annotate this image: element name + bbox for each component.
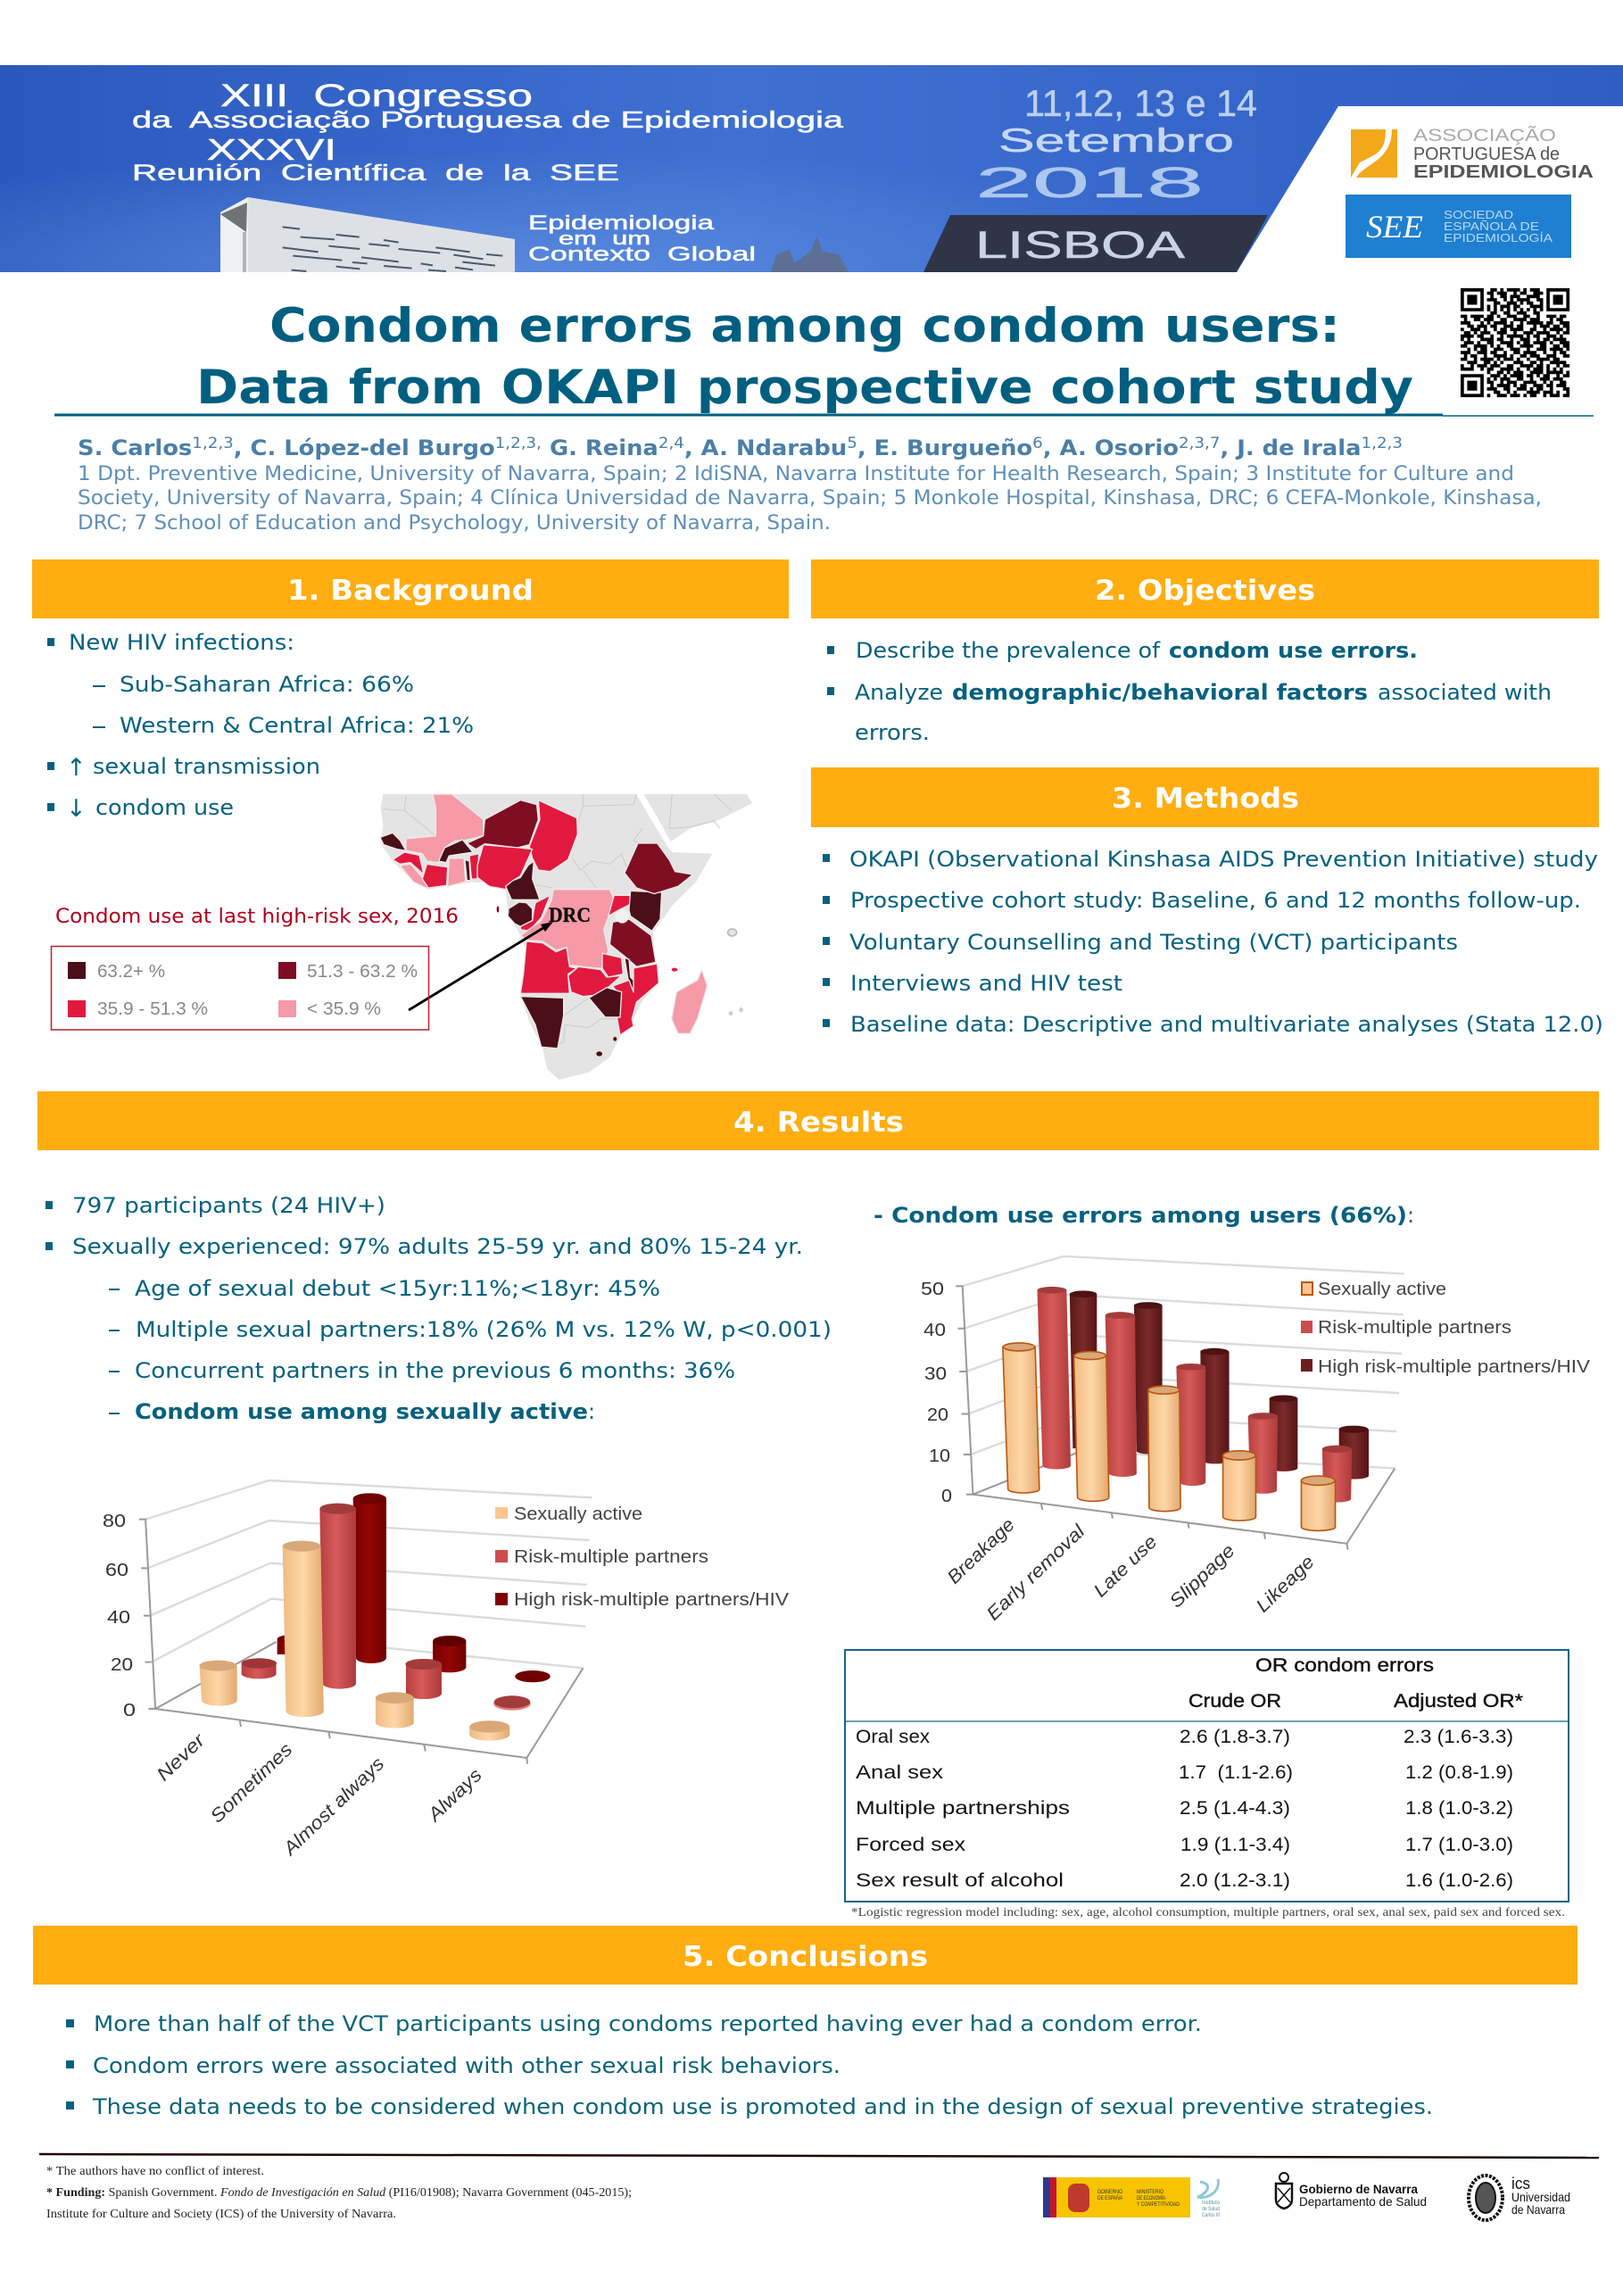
chart legend [495,1504,790,1610]
banner: dates: 11,12, 13 e 14 [1024,82,1257,124]
table row: anal sex: 1.7 (1.1-2.6) [1179,1762,1293,1783]
heading: 2. Objectives [811,559,1599,618]
heading: 4. Results: 4. Results [733,1107,904,1139]
map legend [52,946,428,1030]
table row: forced sex: 1.9 (1.1-3.4) [1180,1835,1290,1855]
table row: forced sex: Forced sex [856,1835,966,1855]
background bullet list: Western & Central Africa: 21% [120,713,474,738]
results bullet list: 797 participants (24 HIV+) [72,1193,385,1218]
affiliations [78,462,1542,535]
header banner [0,65,1623,272]
map legend: 51.3 - 63.2 % [307,962,418,982]
authors: 2,3,7 [1179,435,1221,452]
authors: , A. Ndarabu [684,435,847,460]
table row: forced sex [856,1835,1513,1855]
panel: methods [811,767,1603,1037]
chart axis labels: Never [153,1729,210,1786]
logo: Instituto de Salud Carlos III: Instituto [1202,2201,1221,2206]
background bullet list: ↓ [66,795,87,823]
table row: sex result of alcohol: 1.6 (1.0-2.6) [1405,1870,1513,1891]
logo: Gobierno de Navarra: Departamento de Salud [1299,2194,1427,2209]
subheading: condom use errors: : [1407,1203,1414,1228]
results bullet list: Multiple sexual partners:18% (26% M vs. 12% W, p<0.001) [136,1317,832,1342]
methods bullet list: Interviews and HIV test [850,971,1122,996]
banner: Lisboa box [923,215,1268,272]
title: Condom errors among condom users: [269,299,1340,353]
heading: 3. Methods [811,767,1599,827]
map caption: Condom use at last high-risk sex, 2016 [55,906,459,928]
chart legend: Sexually active [1318,1280,1446,1299]
footer notes: Institute for Culture and Society (ICS) of the University of Navarra. [46,2208,396,2221]
conclusions bullet list: Condom errors were associated with other sexual risk behaviors. [93,2053,840,2078]
affiliations: Society, University of Navarra, Spain; 4 Clínica Universidad de Navarra, Spain; 5 Monkole Hospital, Kinshasa, DRC; 6 CEFA-Monkole, Kinshasa, [78,486,1542,510]
chart legend [1301,1280,1591,1377]
chart axis labels: 20 [111,1655,133,1675]
logo: Associação Portuguesa de Epidemiologia: EPIDEMIOLOGIA [1413,162,1594,182]
authors: 1,2,3 [1362,435,1403,452]
chart axis labels: 20 [927,1405,948,1425]
logo: Instituto de Salud Carlos III: Carlos III [1202,2213,1220,2218]
results bullet list [46,1193,832,1424]
authors: , J. de Irala [1221,435,1362,460]
results bullet list: Sexually experienced: 97% adults 25-59 yr. and 80% 15-24 yr. [72,1234,803,1259]
panel: objectives [811,559,1599,745]
conclusions bullet list: These data needs to be considered when condom use is promoted and in the design of sexual preventive strategies. [92,2094,1433,2119]
banner: congress name: Reunión Científica de la SEE [132,161,619,186]
logo: ICS Universidad de Navarra: Universidad [1511,2190,1570,2204]
table row: sex result of alcohol: 2.0 (1.2-3.1) [1180,1870,1290,1891]
chart legend: High risk-multiple partners/HIV [1318,1357,1591,1377]
logo: Spanish government: GOBIERNO [1097,2190,1122,2195]
table row: anal sex: 1.2 (0.8-1.9) [1405,1762,1513,1783]
chart: condom use errors among users [921,1256,1591,1625]
logo: Spanish government: DE ESPAÑA [1097,2195,1122,2201]
panel: conclusions [33,1926,1577,2119]
results bullet list: Concurrent partners in the previous 6 months: 36% [135,1358,735,1383]
authors: 1,2,3, [495,435,542,452]
banner: logo panel [1237,106,1623,272]
table row: oral sex: 2.6 (1.8-3.7) [1180,1727,1290,1747]
results bullet list: Age of sexual debut <15yr:11%;<18yr: 45% [135,1276,660,1301]
authors: 1,2,3 [192,435,234,452]
chart legend: Risk-multiple partners [514,1547,708,1567]
arrow: legend to DRC [409,922,553,1010]
panel: results [37,1091,1599,1919]
chart axis labels: Early removal [982,1521,1089,1625]
chart axis labels: Almost always [278,1753,389,1861]
table footnote: *Logistic regression model including: sex, age, alcohol consumption, multiple partners, oral sex, anal sex, paid sex and forced sex. [851,1906,1565,1919]
icon: QR code [1461,288,1569,397]
table row: oral sex [856,1727,1513,1747]
logo: Gobierno de Navarra: Gobierno de Navarra [1299,2182,1418,2196]
table header [1188,1655,1523,1712]
heading: 5. Conclusions: 5. Conclusions [683,1941,928,1973]
table header: OR condom errors [1255,1655,1434,1676]
conclusions bullet list: More than half of the VCT participants using condoms reported having ever had a condom error. [94,2011,1202,2036]
table row: anal sex: Anal sex [856,1762,944,1783]
chart axis labels: 40 [107,1608,130,1628]
banner: congress name [132,79,844,186]
heading: 5. Conclusions [33,1926,1577,1985]
results bullet list: : [588,1399,595,1424]
chart axis labels: 30 [924,1364,947,1384]
background bullet list: condom use [95,795,234,820]
banner: theme: em um [559,229,650,249]
chart axis labels: Breakage [943,1514,1019,1588]
logo: Spanish government: MINISTERIO [1137,2190,1163,2195]
banner: building illustration [220,197,849,272]
table row: oral sex: Oral sex [856,1727,931,1747]
banner: congress name: XIII Congresso [220,79,533,113]
chart legend: High risk-multiple partners/HIV [514,1590,790,1610]
chart axis labels: 0 [941,1487,952,1506]
chart axis labels: 80 [103,1512,126,1531]
table: OR condom errors [845,1650,1569,1902]
map: condom use in Africa [380,794,752,1080]
footer notes: * The authors have no conflict of interest. [46,2165,264,2178]
authors: 5 [847,435,857,452]
heading: 1. Background: 1. Background [287,575,534,607]
banner: congress name: XXXVI [207,133,336,166]
footer notes [46,2165,632,2221]
title [196,299,1413,415]
logo: Instituto de Salud Carlos III [1197,2179,1221,2218]
background bullet list [47,630,474,823]
logo: Sociedad Española de Epidemiología [1346,195,1571,258]
panel: background [32,559,789,1080]
table row: sex result of alcohol: Sex result of alcohol [856,1870,1064,1891]
background bullet list: Sub-Saharan Africa: 66% [120,672,414,697]
table row: forced sex: 1.7 (1.0-3.0) [1405,1835,1513,1855]
heading: 4. Results [37,1091,1599,1150]
logo: Spanish government: Y COMPETITIVIDAD [1137,2202,1180,2208]
table row: multiple partnerships: Multiple partnerships [856,1798,1070,1819]
heading: 3. Methods: 3. Methods [1112,783,1299,815]
authors: G. Reina [542,435,658,460]
subheading: condom use errors: - Condom use errors among users (66%) [874,1203,1407,1228]
banner: Lisboa box: LISBOA [975,224,1185,267]
chart axis labels: Sometimes [206,1739,297,1828]
authors: 6 [1032,435,1043,452]
logo: Sociedad Española de Epidemiología: SEE [1366,209,1423,245]
map legend: 35.9 - 51.3 % [97,999,208,1019]
chart axis labels: Slippage [1165,1540,1239,1612]
objective 1: condom use errors. [1169,638,1418,663]
chart axis labels: Late use [1089,1531,1161,1602]
logo: ICS Universidad de Navarra [1469,2175,1570,2220]
heading: 1. Background [32,559,789,618]
chart legend: Risk-multiple partners [1318,1318,1511,1338]
logo: Sociedad Española de Epidemiología: SOCIEDAD [1444,208,1513,221]
chart axis labels: 50 [921,1280,944,1299]
authors: 2,4 [658,435,684,452]
table header: Adjusted OR* [1394,1691,1523,1712]
logo: Sociedad Española de Epidemiología: EPIDEMIOLOGÍA [1444,231,1553,245]
authors: , E. Burgueño [857,435,1032,460]
map legend: 63.2+ % [97,962,165,982]
table row: multiple partnerships [856,1798,1513,1819]
authors: S. Carlos [78,435,184,460]
chart: condom use among sexually active [103,1480,790,1861]
chart axis labels: 0 [123,1701,136,1720]
banner: theme [528,211,756,265]
methods bullet list [823,847,1603,1037]
banner: congress name: da Associação Portuguesa de Epidemiologia [132,106,844,133]
table row: multiple partnerships: 2.5 (1.4-4.3) [1180,1798,1290,1819]
map legend: < 35.9 % [307,999,381,1019]
logo: Instituto de Salud Carlos III: de Salud [1202,2207,1220,2212]
objective 2: associated with [1378,680,1552,705]
title: Data from OKAPI prospective cohort study [196,361,1413,415]
objective 1: Describe the prevalence of [856,638,1161,663]
objective 2: Analyze [855,680,943,705]
logo: Spanish government [1043,2177,1190,2217]
logo: ICS Universidad de Navarra: ics [1511,2175,1530,2192]
banner: dates [975,82,1257,207]
logo: Associação Portuguesa de Epidemiologia: PORTUGUESA de [1413,145,1560,164]
objective 2: errors. [855,720,930,745]
results bullet list: Condom use among sexually active [135,1399,588,1424]
logo: ICS Universidad de Navarra: de Navarra [1511,2202,1565,2217]
banner: theme: Epidemiologia [528,211,715,234]
background bullet list: ↑ [66,754,87,782]
logo: Gobierno de Navarra [1276,2173,1427,2209]
table row: sex result of alcohol [856,1870,1513,1891]
objective 2 [827,680,1552,745]
chart axis labels: 60 [105,1561,128,1580]
heading: 2. Objectives: 2. Objectives [1095,575,1315,607]
objective 1 [827,638,1418,663]
table header: Crude OR [1188,1691,1281,1712]
methods bullet list: Baseline data: Descriptive and multivariate analyses (Stata 12.0) [850,1012,1603,1037]
authors: , A. Osorio [1043,435,1179,460]
chart axis labels: 40 [923,1321,946,1340]
table row: anal sex [856,1762,1513,1783]
banner: theme: Contexto Global [528,243,756,265]
methods bullet list: Prospective cohort study: Baseline, 6 and 12 months follow-up. [850,888,1581,913]
methods bullet list: Voluntary Counselling and Testing (VCT) participants [849,930,1458,955]
banner: dates: 2018 [975,160,1204,207]
affiliations: DRC; 7 School of Education and Psychology, University of Navarra, Spain. [78,511,831,535]
banner: dates: Setembro [998,122,1234,159]
table row: oral sex: 2.3 (1.6-3.3) [1404,1727,1513,1747]
logo: Spanish government: DE ECONOMÍA [1137,2195,1165,2201]
logo: Sociedad Española de Epidemiología: ESPAÑOLA DE [1444,220,1539,233]
chart axis labels: 10 [929,1446,950,1466]
chart axis labels [921,1280,1319,1625]
table row: multiple partnerships: 1.8 (1.0-3.2) [1405,1798,1513,1819]
conclusions bullet list [66,2011,1433,2119]
chart axis labels: Always [423,1764,486,1827]
logo: Associação Portuguesa de Epidemiologia: ASSOCIAÇÃO [1413,126,1556,145]
chart axis labels [103,1512,486,1861]
background bullet list: New HIV infections: [69,630,294,655]
background bullet list: sexual transmission [93,754,320,779]
footer notes: * Funding: Spanish Government. Fondo de Investigación en Salud (PI16/01908); Navarra Government (045-2015); [46,2186,632,2200]
map label: DRC: DRC [549,904,591,926]
authors: , C. López-del Burgo [234,435,495,460]
logo: Associação Portuguesa de Epidemiologia [1351,126,1594,182]
objective 2: demographic/behavioral factors [952,680,1368,705]
chart axis labels: Likeage [1252,1552,1319,1617]
affiliations: 1 Dpt. Preventive Medicine, University of Navarra, Spain; 2 IdiSNA, Navarra Institute for Health Research, Spain; 3 Institute for Culture and [78,462,1514,485]
chart legend: Sexually active [514,1504,642,1524]
methods bullet list: OKAPI (Observational Kinshasa AIDS Prevention Initiative) study [849,847,1598,872]
